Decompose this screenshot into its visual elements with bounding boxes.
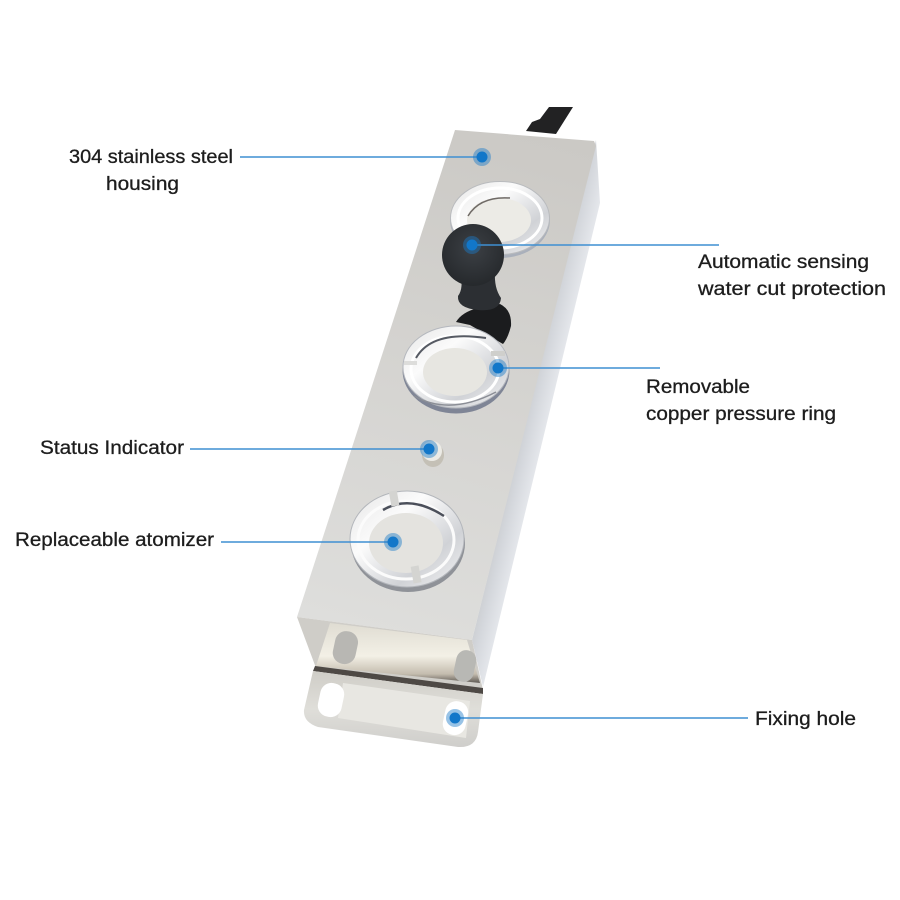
- lower flange inset: [338, 683, 470, 738]
- callout: housing: 304 stainless steel: [69, 147, 233, 168]
- callout: replaceable atomizer: [15, 530, 402, 551]
- callout: copper pressure ring: copper pressure ring: [646, 404, 836, 425]
- lower right hole: [441, 699, 470, 737]
- ring 2: [402, 326, 510, 414]
- lower left hole: [316, 681, 346, 719]
- status indicator light: [422, 441, 442, 461]
- ring 3: [350, 490, 465, 592]
- callout: water cut protection: Automatic sensing: [698, 252, 869, 273]
- bracket recess: [297, 617, 483, 690]
- product photo: stainless steel atomizer housing: [297, 107, 600, 747]
- lower bracket flange: [304, 671, 483, 747]
- housing top face: [297, 130, 596, 640]
- callout: copper pressure ring: [489, 359, 836, 425]
- upper right slot: [452, 648, 478, 684]
- water sensor ball: [442, 224, 504, 286]
- callout: fixing hole: Fixing hole: [755, 709, 856, 730]
- water sensor stem: [458, 272, 501, 310]
- callout: fixing hole: [446, 709, 856, 730]
- callout: replaceable atomizer: Replaceable atomizer: [15, 530, 215, 551]
- callout: status indicator: [40, 438, 438, 459]
- callout: copper pressure ring: Removable: [646, 377, 750, 398]
- callout: housing: [69, 147, 491, 195]
- upper bracket plate: [316, 623, 480, 683]
- upper left slot: [331, 629, 360, 666]
- bracket fold line: [313, 666, 483, 694]
- power cable: [526, 107, 573, 134]
- status indicator lens: [422, 443, 444, 467]
- housing side face: [472, 140, 600, 687]
- callout: water cut protection: water cut protection: [697, 279, 886, 300]
- callout: water cut protection: [463, 236, 886, 300]
- ring 1: [450, 182, 550, 258]
- callout: housing: housing: [106, 174, 179, 195]
- water sensor stem base: [456, 304, 511, 344]
- callout: status indicator: Status Indicator: [40, 438, 185, 459]
